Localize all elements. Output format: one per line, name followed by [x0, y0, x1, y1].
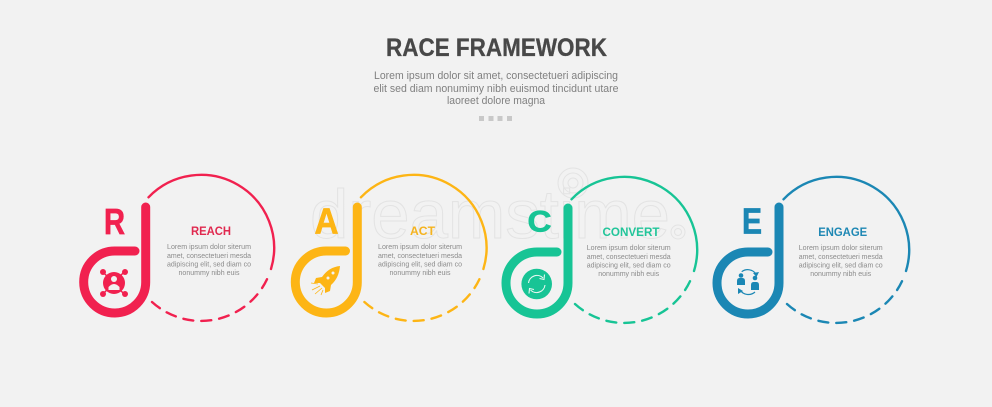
body text: reach: adipiscing elit, sed diam co — [167, 260, 251, 268]
letter mark: act — [295, 207, 357, 313]
body text: act: adipiscing elit, sed diam co — [378, 260, 462, 268]
title: RACE FRAMEWORK — [386, 34, 607, 62]
body text: convert: nonummy nibh euis — [598, 269, 659, 278]
icon: convert cycle — [521, 269, 552, 299]
body text: reach: Lorem ipsum dolor siterum — [167, 242, 251, 251]
ring: reach — [148, 175, 274, 321]
letter: E: E — [742, 200, 762, 242]
pagination dots — [479, 116, 512, 121]
body text: reach: amet, consectetueri mesda — [167, 251, 252, 260]
icon: rocket — [311, 266, 340, 295]
text: dreamstime — [310, 176, 670, 253]
ring: engage — [784, 177, 909, 323]
icon: engagement people — [737, 270, 759, 295]
body text: act: amet, consectetueri mesda — [378, 251, 463, 260]
subtitle text — [374, 70, 619, 107]
body text: engage: nonummy nibh euis — [810, 269, 871, 278]
letter: A: A — [314, 200, 338, 242]
heading: engage: ENGAGE — [818, 225, 867, 239]
body text: engage — [799, 243, 883, 278]
body text: act: nonummy nibh euis — [390, 268, 451, 277]
panel: act — [295, 175, 487, 321]
panel: convert — [506, 177, 697, 323]
body text: convert: adipiscing elit, sed diam co — [587, 260, 671, 270]
body text: engage: amet, consectetueri mesda — [799, 252, 883, 261]
subtitle text: laoreet dolore magna — [447, 95, 545, 107]
body text: convert: Lorem ipsum dolor siterum — [587, 243, 671, 252]
heading: convert: CONVERT — [602, 225, 660, 239]
body text: convert — [587, 243, 671, 278]
body text: act — [378, 242, 463, 277]
panel: reach — [84, 175, 274, 321]
subtitle text: elit sed diam nonumimy nibh euismod tincidunt utare — [374, 83, 619, 95]
body text: engage: Lorem ipsum dolor siterum — [799, 243, 883, 252]
letter: R: R — [104, 201, 125, 242]
letter mark: engage — [717, 207, 779, 314]
body text: engage: adipiscing elit, sed diam co — [799, 260, 883, 270]
letter: C: C — [528, 206, 552, 238]
icon: audience target — [100, 269, 128, 297]
body text: convert: amet, consectetueri mesda — [587, 252, 671, 261]
subtitle text: Lorem ipsum dolor sit amet, consectetueri adipiscing — [374, 70, 618, 82]
ring: convert — [572, 177, 697, 323]
body text: reach — [167, 242, 252, 277]
heading: act: ACT — [410, 224, 436, 238]
panel: engage — [717, 177, 909, 323]
body text: reach: nonummy nibh euis — [178, 268, 240, 277]
ring: act — [361, 175, 487, 321]
body text: act: Lorem ipsum dolor siterum — [378, 242, 462, 251]
heading: reach: REACH — [191, 224, 231, 238]
letter mark: reach — [84, 207, 146, 313]
letter mark: convert — [506, 208, 568, 314]
